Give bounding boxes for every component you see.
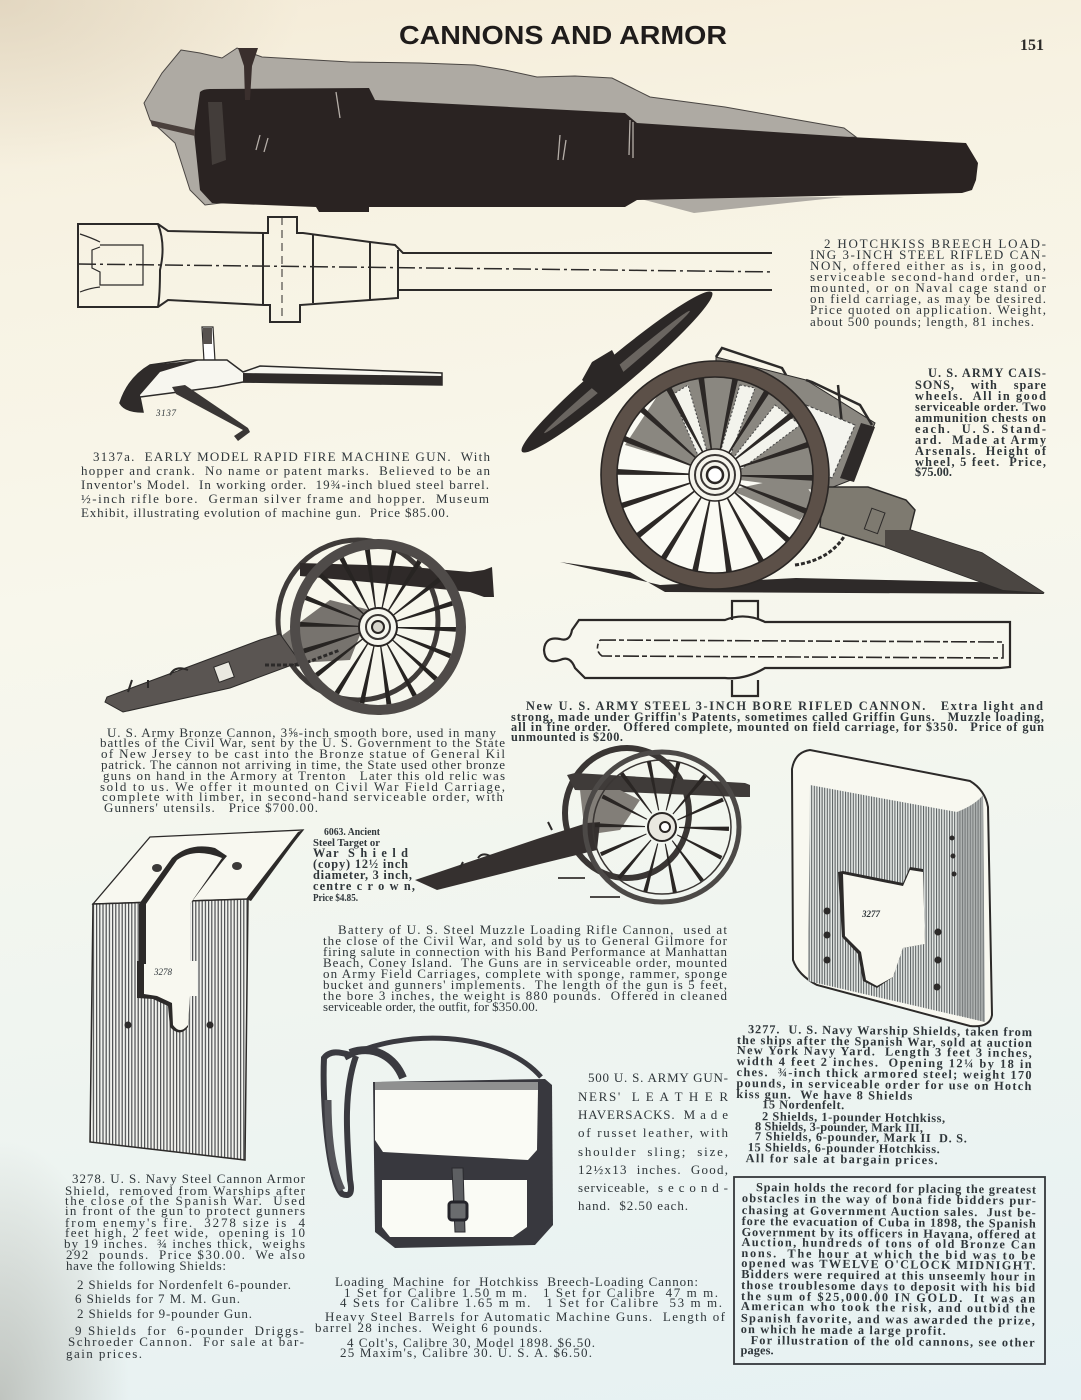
text: ancient steel target: (copy) 12½ inch: [313, 857, 408, 871]
page number: 151: [1020, 37, 1044, 54]
text: shield 3278 description: Schroeder Cannon. For sale at bar-: [68, 1334, 304, 1349]
illustration: shield 3277: 3277: [861, 909, 880, 919]
text: shield 3277 description: 7 Shields, 6-pounder, Mark II D. S.: [755, 1129, 967, 1145]
text: new steel rifled cannon: unmounted is $200.: [511, 730, 623, 744]
text: loading machine and steel barrels: 4 Sets for Calibre 1.65 m m. 1 Set for Calibre 53 m m.: [340, 1295, 722, 1310]
text: ancient steel target: [313, 826, 415, 904]
illustration: shield 3277: [792, 750, 992, 1026]
text: bronze cannon description: Gunners' utensils. Price $700.00.: [104, 800, 318, 815]
text: haversacks: 500 U. S. ARMY GUN-: [588, 1070, 728, 1085]
callout: Spain auction anecdote: fore the evacuation of Cuba in 1898, the Spanish: [742, 1214, 1036, 1231]
text: caissons: SONS, with spare: [915, 378, 1047, 392]
text: bronze cannon description: of New Jersey to be cast into the Bronze statue of General Kil: [101, 746, 505, 761]
text: ancient steel target: diameter, 3 inch,: [313, 868, 412, 882]
callout: Spain auction anecdote: nons. The hour at which the bid was to be: [741, 1246, 1036, 1263]
callout: Spain auction anecdote: the sum of $25,000.00 IN GOLD. It was an: [741, 1289, 1035, 1306]
text: bronze cannon description: U. S. Army Bronze Cannon, 3⅝-inch smooth bore, used in many: [107, 725, 496, 740]
text: caissons: [915, 366, 1047, 479]
text: battery description: the close of the Civil War, and sold by us to General Gilmore for: [323, 933, 728, 948]
text: Hotchkiss breech loading rifled cannon: on field carriage, as may be desired.: [810, 291, 1046, 306]
text: 3137a rapid fire machine gun: hopper and crank. No name or patent marks. Believed to be an: [81, 463, 490, 478]
text: shield 3278 description: have the following Shields:: [66, 1258, 226, 1273]
text: shield 3277 description: kiss gun. We have 8 Shields: [736, 1087, 913, 1103]
text: caissons: ard. Made at Army: [915, 433, 1047, 447]
text: new steel rifled cannon: [511, 699, 1044, 744]
text: ancient steel target: Steel Target or: [313, 837, 380, 849]
title: CANNONS AND ARMOR: [399, 20, 727, 50]
text: haversacks: of russet leather, with: [578, 1125, 728, 1140]
text: shield 3277 description: [736, 1022, 1033, 1168]
callout: Spain auction anecdote: opened was TWELVE O'CLOCK MIDNIGHT.: [741, 1256, 1035, 1273]
illustration: large cannon photo: [144, 48, 978, 213]
illustration: army caisson with spare wheel: [512, 281, 1044, 594]
illustration: cannon plan drawing: [78, 217, 772, 322]
text: caissons: ammunition chests on: [915, 411, 1046, 425]
text: caissons: wheels. All in good: [915, 389, 1046, 403]
text: Hotchkiss breech loading rifled cannon: about 500 pounds; length, 81 inches.: [810, 314, 1034, 329]
text: new steel rifled cannon: strong, made under Griffin's Patents, sometimes called Griffin Guns. Muzzle loading,: [511, 710, 1044, 724]
illustration: shield 3278: 3278: [153, 967, 172, 977]
text: shield 3277 description: 3277. U. S. Navy Warship Shields, taken from: [748, 1022, 1033, 1039]
text: shield 3278 description: from enemy's fire. 3278 size is 4: [65, 1215, 306, 1230]
text: Hotchkiss breech loading rifled cannon: Price quoted on application. Weight,: [810, 302, 1046, 317]
text: shield 3277 description: 15 Nordenfelt.: [762, 1097, 844, 1112]
text: Hotchkiss breech loading rifled cannon: 2 HOTCHKISS BREECH LOAD-: [824, 236, 1046, 251]
main wheel: [601, 361, 829, 589]
text: battery description: the bore 3 inches, the weight is 880 pounds. Offered in cleaned: [323, 988, 728, 1003]
text: shield 3278 description: by 19 inches. ¾ inches thick, weighs: [64, 1236, 305, 1251]
illustration: bronze field cannon: [105, 540, 494, 712]
text: battery description: on Army Field Carriages, complete with sponge, rammer, sponge: [323, 966, 727, 981]
text: Hotchkiss breech loading rifled cannon: [810, 236, 1047, 329]
text: shield 3277 description: 2 Shields, 1-pounder Hotchkiss,: [762, 1109, 945, 1125]
text: 3137a rapid fire machine gun: Inventor's Model. In working order. 19¾-inch blued steel barrel.: [81, 477, 489, 492]
text: shield 3277 description: 8 Shields, 3-pounder, Mark III,: [755, 1119, 923, 1135]
text: haversacks: NERS' L E A T H E R: [578, 1089, 728, 1104]
text: Hotchkiss breech loading rifled cannon: serviceable second-hand order, un-: [810, 269, 1046, 284]
text: Hotchkiss breech loading rifled cannon: mounted, or on Naval cage stand or: [810, 280, 1047, 295]
text: battery description: [323, 922, 728, 1014]
text: bronze cannon description: sold to us. We offer it mounted on Civil War Field Carriage,: [100, 779, 505, 794]
text: battery description: serviceable order, the outfit, for $350.00.: [323, 999, 538, 1014]
callout: Spain auction anecdote: Bidders were required at this unseemly hour in: [741, 1267, 1035, 1284]
illustration: leather haversack: [324, 1038, 553, 1248]
callout: Spain auction anecdote: pages.: [741, 1343, 774, 1357]
text: shield 3278 description: [64, 1171, 306, 1361]
text: new steel rifled cannon: New U. S. ARMY STEEL 3-INCH BORE RIFLED CANNON. Extra light and: [526, 699, 1043, 713]
text: 3137a rapid fire machine gun: [81, 449, 490, 520]
text: shield 3277 description: New York Navy Yard. Length 3 feet 3 inches,: [737, 1043, 1032, 1060]
illustration: early machine gun: 3137: [155, 408, 176, 418]
ammunition chests: [716, 348, 875, 500]
text: loading machine and steel barrels: Loading Machine for Hotchkiss Breech-Loading Cannon:: [335, 1274, 698, 1289]
illustration: battery muzzle loading rifle cannon: [415, 748, 750, 902]
text: bronze cannon description: [100, 725, 505, 815]
text: bronze cannon description: patrick. The cannon not arriving in time, the State used other bronze: [101, 757, 505, 772]
text: shield 3277 description: the ships after the Spanish War, sold at auction: [737, 1033, 1032, 1050]
text: shield 3278 description: 3278. U. S. Navy Steel Cannon Armor: [72, 1171, 306, 1186]
text: haversacks: serviceable, s e c o n d -: [578, 1180, 728, 1195]
text: battery description: bucket and gunners' implements. The length of the gun is 5 feet,: [323, 977, 727, 992]
text: shield 3277 description: width 4 feet 2 inches. Opening 12¼ by 18 in: [737, 1054, 1032, 1071]
text: loading machine and steel barrels: 25 Maxim's, Calibre 30. U. S. A. $6.50.: [340, 1345, 592, 1360]
text: shield 3278 description: 2 Shields for Nordenfelt 6-pounder.: [77, 1277, 291, 1292]
text: caissons: U. S. ARMY CAIS-: [928, 366, 1046, 380]
text: ancient steel target: centre c r o w n,: [313, 879, 415, 893]
text: bronze cannon description: guns on hand in the Armory at Trenton Later this old relic was: [103, 768, 505, 783]
callout: Spain auction anecdote: chasing at Government Auction sales. Just be-: [742, 1203, 1036, 1220]
illustration: early machine gun: [120, 327, 442, 441]
text: shield 3278 description: in front of the gun to protect gunners: [65, 1203, 305, 1218]
callout: Spain auction anecdote: obstacles in the way of bona fide bidders pur-: [742, 1191, 1036, 1208]
text: shield 3277 description: 15 Shields, 6-pounder Hotchkiss.: [748, 1140, 940, 1156]
callout: Spain auction anecdote: on which he made a large profit.: [741, 1322, 946, 1338]
trail: [820, 487, 1044, 593]
text: shield 3277 description: All for sale at bargain prices.: [746, 1151, 938, 1167]
text: shield 3278 description: gain prices.: [66, 1346, 142, 1361]
text: loading machine and steel barrels: Heavy Steel Barrels for Automatic Machine Guns. Length of: [325, 1309, 726, 1324]
text: new steel rifled cannon: all in fine order. Offered complete, mounted on field carriage, for $350. Price of gun: [511, 720, 1044, 734]
text: shield 3278 description: the close of the Spanish War. Used: [65, 1193, 306, 1208]
spare wheel: [512, 281, 722, 463]
text: battery description: firing salute in connection with his Band Performance at Manhattan: [323, 944, 728, 959]
text: haversacks: [578, 1070, 728, 1213]
text: battery description: Beach, Coney Island. The Guns are in serviceable order, mounted: [323, 955, 728, 970]
callout: Spain auction anecdote: those troublesome days to deposit with his bid: [741, 1278, 1035, 1295]
text: haversacks: shoulder sling; size,: [578, 1144, 728, 1159]
callout: Spain auction anecdote: Government by its officers in Havana, offered at: [742, 1225, 1037, 1242]
text: shield 3278 description: 292 pounds. Price $30.00. We also: [66, 1247, 305, 1262]
text: caissons: Arsenals. Height of: [915, 444, 1047, 458]
text: caissons: $75.00.: [915, 465, 952, 479]
text: shield 3277 description: ches. ¾-inch thick armored steel; weight 170: [736, 1065, 1032, 1082]
text: loading machine and steel barrels: 4 Colt's, Calibre 30, Model 1898. $6.50.: [347, 1335, 595, 1350]
text: loading machine and steel barrels: [315, 1274, 726, 1360]
callout: Spain auction anecdote: Auction, hundreds of tons of old Bronze Can: [741, 1235, 1036, 1252]
text: shield 3278 description: Shield, removed from Warships after: [65, 1183, 306, 1198]
text: haversacks: hand. $2.50 each.: [578, 1198, 688, 1213]
text: haversacks: HAVERSACKS. M a d e: [578, 1107, 728, 1122]
chain: [795, 535, 845, 565]
text: shield 3278 description: 6 Shields for 7 M. M. Gun.: [75, 1291, 240, 1306]
text: Hotchkiss breech loading rifled cannon: ING 3-INCH STEEL RIFLED CAN-: [810, 247, 1046, 262]
text: loading machine and steel barrels: barrel 28 inches. Weight 6 pounds.: [315, 1320, 542, 1335]
text: bronze cannon description: battles of the Civil War, sent by the U. S. Government to the State: [100, 735, 505, 750]
text: haversacks: 12½x13 inches. Good,: [578, 1162, 728, 1177]
callout: Spain auction anecdote: For illustration of the old cannons, see other: [751, 1333, 1035, 1350]
text: loading machine and steel barrels: 1 Set for Calibre 1.50 m m. 1 Set for Calibre 47 m m.: [344, 1285, 718, 1300]
text: 3137a rapid fire machine gun: ½-inch rifle bore. German silver frame and hopper. Museum: [81, 491, 489, 506]
text: Hotchkiss breech loading rifled cannon: NON, offered either as is, in good,: [810, 258, 1046, 273]
text: shield 3278 description: feet high, 2 feet wide, opening is 10: [65, 1225, 305, 1240]
text: battery description: Battery of U. S. Steel Muzzle Loading Rifle Cannon, used at: [338, 922, 727, 937]
text: ancient steel target: War S h i e l d: [313, 846, 408, 860]
text: 3137a rapid fire machine gun: Exhibit, illustrating evolution of machine gun. Price $85.00.: [81, 505, 449, 520]
text: shield 3277 description: pounds, in serviceable order for use on Hotch: [736, 1076, 1032, 1093]
text: shield 3278 description: 2 Shields for 9-pounder Gun.: [77, 1306, 252, 1321]
text: caissons: serviceable order. Two: [915, 400, 1046, 414]
text: shield 3278 description: 9 Shields for 6-pounder Driggs-: [75, 1323, 304, 1338]
text: ancient steel target: 6063. Ancient: [324, 826, 380, 838]
text: bronze cannon description: complete with limber, in second-hand serviceable order, with: [102, 789, 503, 804]
callout: Spain auction anecdote: Spanish favorite, and was awarded the prize,: [741, 1311, 1035, 1328]
ground shadow: [560, 562, 1044, 594]
callout: Spain auction anecdote: American who took the risk, and outbid the: [741, 1299, 1036, 1316]
callout: Spain auction anecdote: Spain holds the record for placing the greatest: [756, 1180, 1037, 1197]
text: ancient steel target: Price $4.85.: [313, 892, 358, 904]
illustration: Griffin gun outline: [544, 601, 1010, 696]
text: 3137a rapid fire machine gun: 3137a. EARLY MODEL RAPID FIRE MACHINE GUN. With: [93, 449, 490, 464]
illustration: shield 3278: [90, 830, 303, 1160]
text: caissons: wheel, 5 feet. Price,: [915, 455, 1046, 469]
text: caissons: each. U. S. Stand-: [915, 422, 1046, 436]
callout: Spain auction anecdote: [734, 1177, 1045, 1364]
